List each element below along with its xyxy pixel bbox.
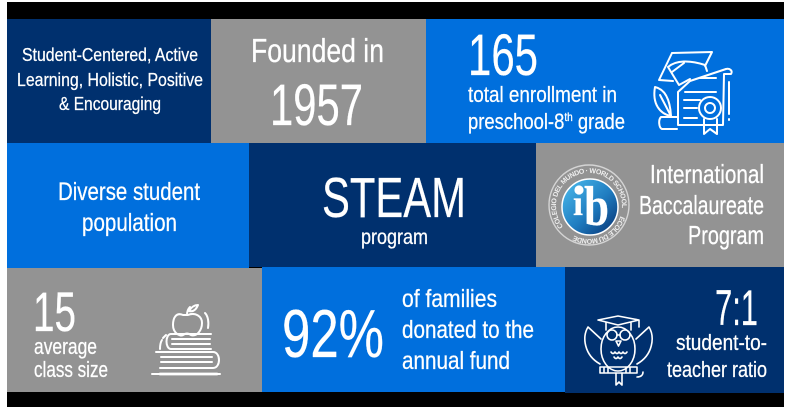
panel: philosophy: Learning, Holistic, Positive	[17, 70, 203, 90]
panel: class size: 15	[33, 280, 76, 343]
panel: founded: 1957	[270, 73, 363, 138]
panel: donations: annual fund	[402, 347, 510, 375]
panel: enrollment: th	[564, 110, 573, 124]
panel: enrollment: 165	[468, 23, 538, 88]
panel: founded: Founded in	[251, 32, 384, 69]
panel: class size	[7, 268, 262, 392]
panel: diversity: population	[82, 209, 177, 237]
panel: founded	[211, 19, 426, 143]
icon: IB logo	[548, 164, 630, 246]
panel: IB: International	[650, 159, 764, 189]
panel: STEAM	[249, 143, 536, 267]
panel: diversity: Diverse student	[58, 178, 200, 206]
panel: ratio: teacher ratio	[667, 357, 767, 382]
panel: class size: average	[34, 334, 97, 359]
panel: donations: of families	[402, 285, 497, 313]
panel: philosophy: Student-Centered, Active	[22, 45, 198, 65]
panel: IB: Program	[688, 220, 764, 250]
panel: ratio	[565, 267, 784, 393]
panel: enrollment: grade	[573, 109, 625, 134]
panel: philosophy: & Encouraging	[59, 94, 161, 114]
icon: diploma	[654, 52, 732, 134]
panel: enrollment: total enrollment in	[468, 82, 617, 107]
panel: philosophy	[7, 19, 211, 143]
panel: enrollment: preschool-8	[468, 109, 583, 134]
panel: class size: class size	[34, 357, 108, 382]
panel: STEAM: STEAM	[322, 166, 466, 230]
panel: IB	[536, 143, 784, 267]
panel: enrollment	[426, 19, 784, 143]
panel: donations: 92%	[282, 296, 384, 372]
panel: diversity	[7, 143, 249, 268]
panel: ratio: student-to-	[676, 330, 767, 355]
panel: STEAM: program	[361, 226, 428, 249]
icon: owl with cap	[585, 316, 652, 385]
icon: IB logo: COLEGIO DEL MUNDO · WORLD SCHOOL	[551, 168, 627, 228]
panel: donations	[262, 267, 565, 392]
icon: IB logo: b	[584, 176, 609, 238]
panel: donations: donated to the	[402, 316, 534, 344]
icon: books and apple	[152, 305, 220, 374]
panel: ratio: 7:1	[715, 280, 758, 336]
icon: IB logo: ÉCOLE DU MONDE	[572, 216, 626, 244]
icon: IB logo: ı	[573, 183, 583, 223]
